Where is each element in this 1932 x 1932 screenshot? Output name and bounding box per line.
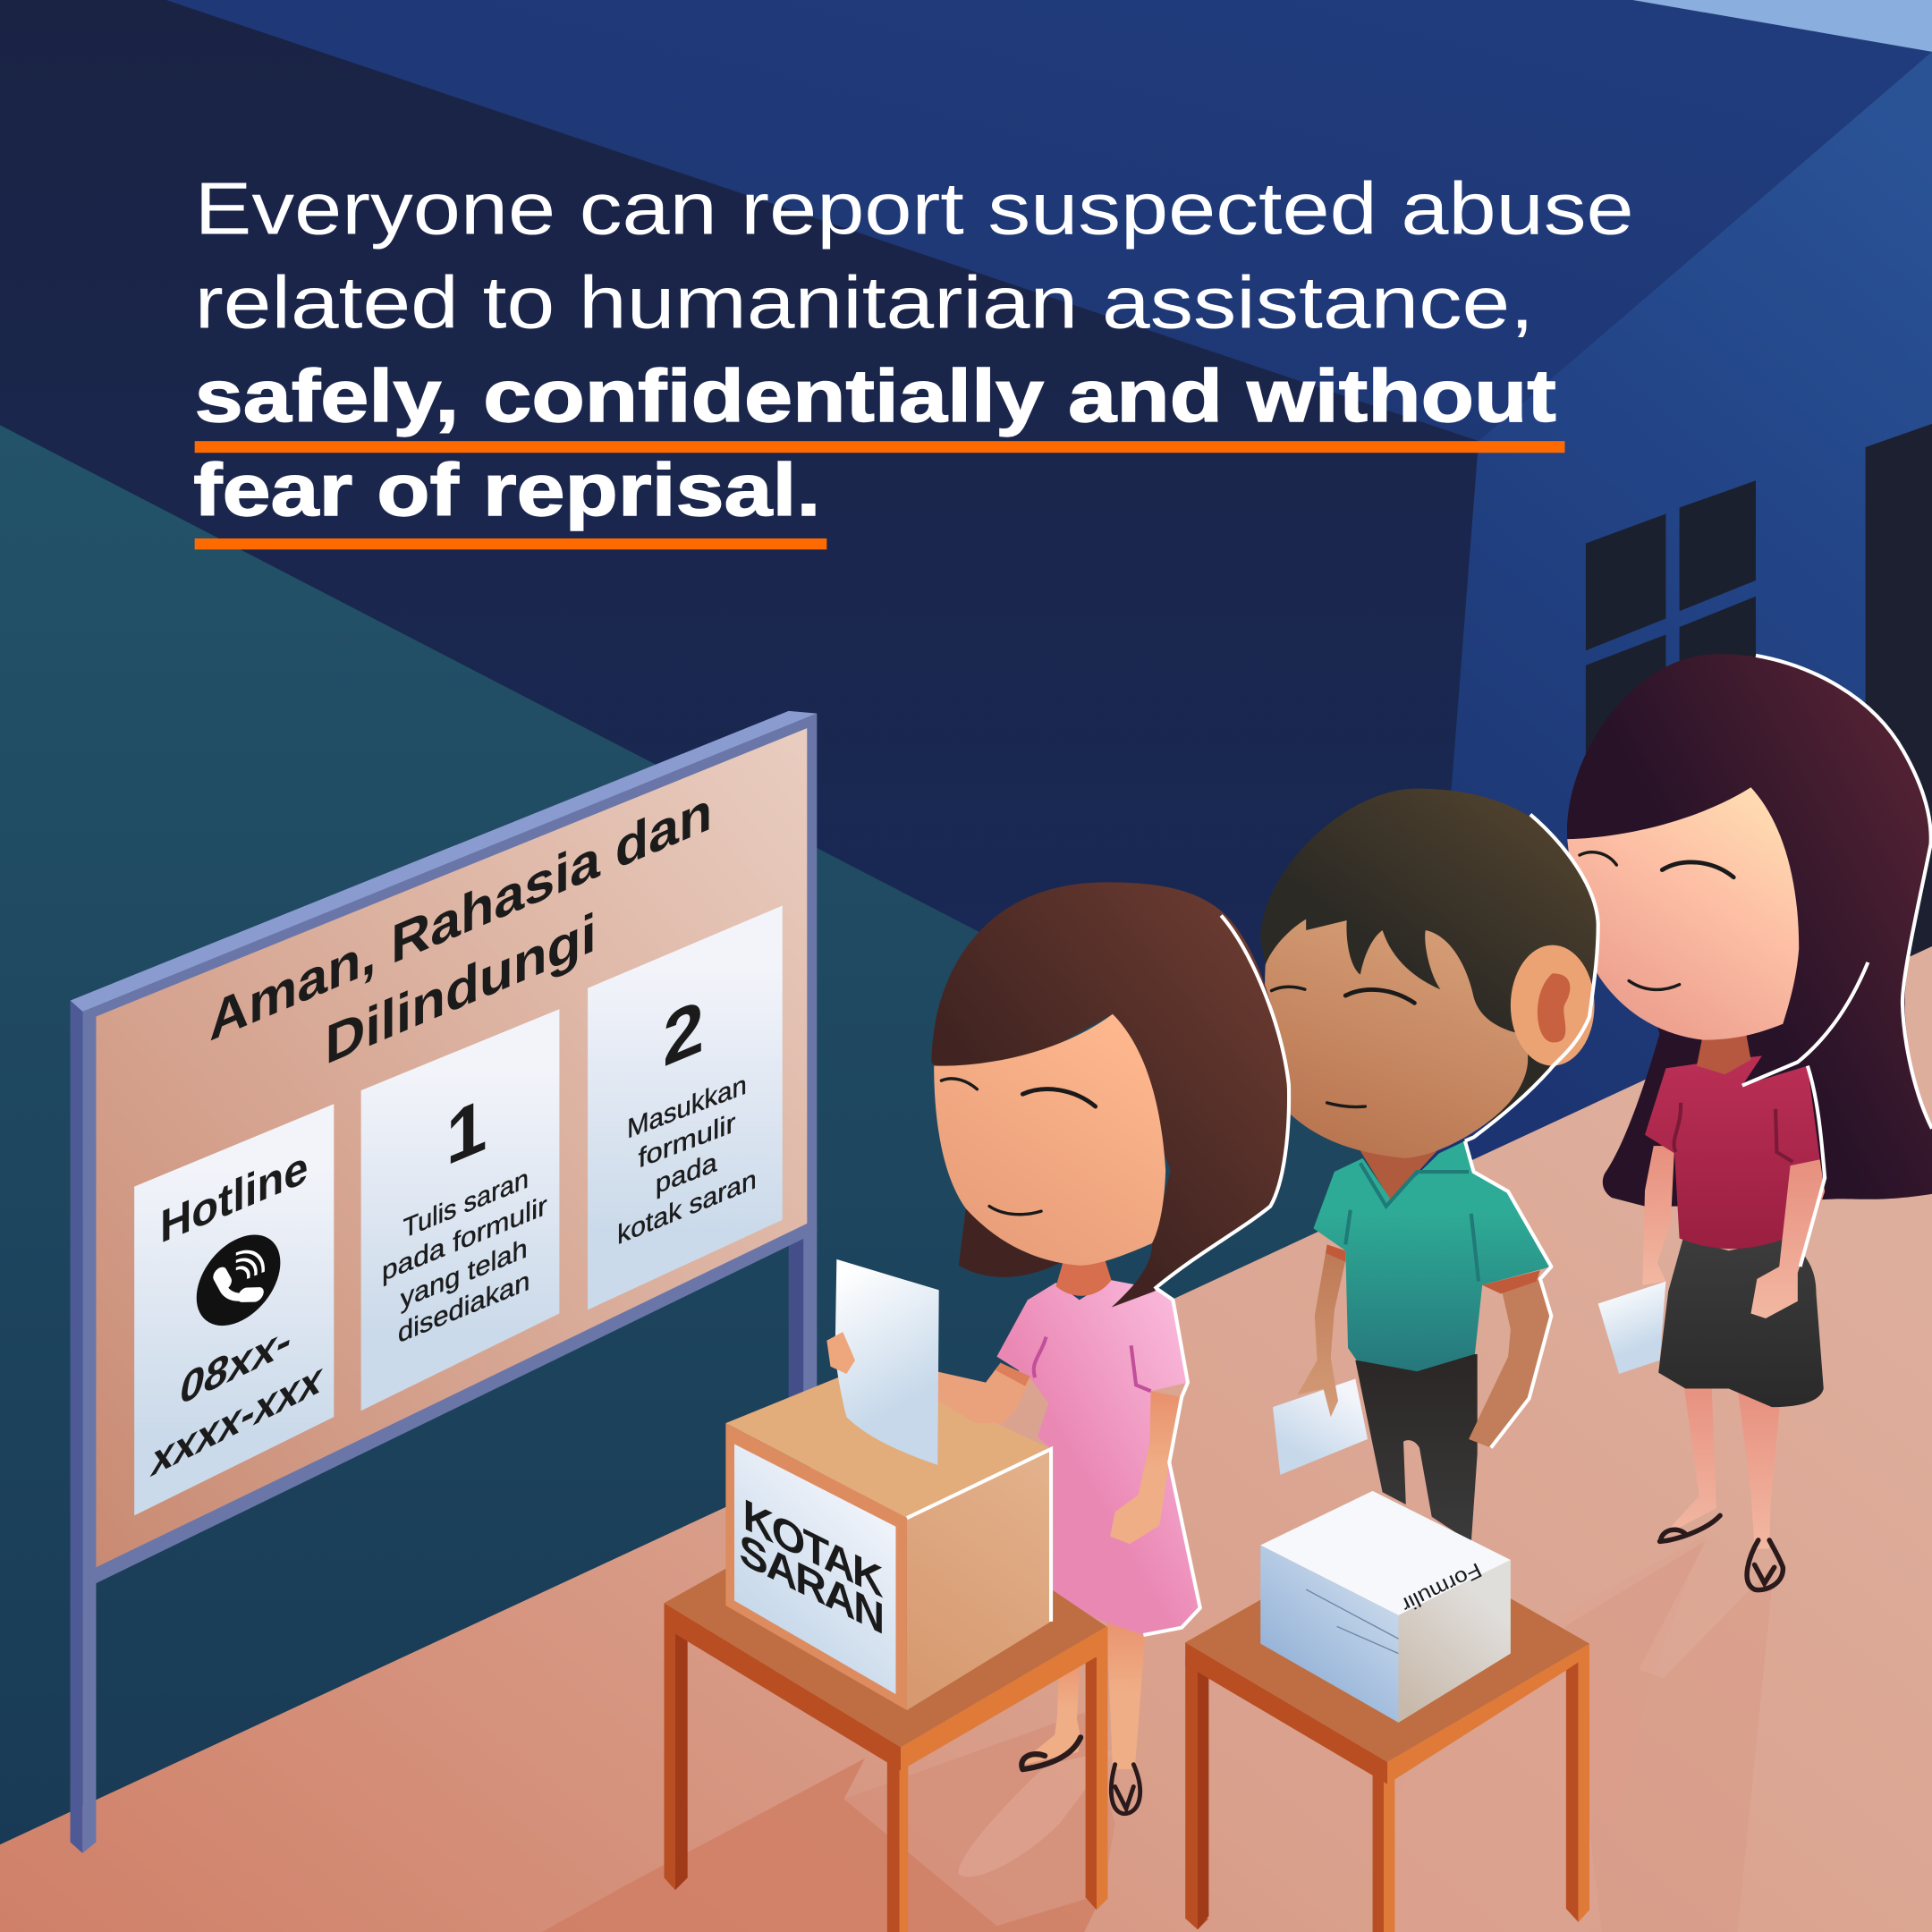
back wall bbox=[0, 0, 1479, 1182]
notice board bbox=[71, 711, 817, 1853]
hair bbox=[931, 882, 1289, 1308]
person: woman in red, back of line bbox=[1567, 654, 1932, 1590]
legs bbox=[1025, 1614, 1146, 1769]
right arm bbox=[1110, 1391, 1182, 1544]
right arm bbox=[1751, 1159, 1825, 1318]
door bbox=[1866, 424, 1932, 986]
face bbox=[934, 1014, 1165, 1266]
right wall bbox=[1393, 52, 1932, 1214]
step 2 text: kotak saran bbox=[617, 1163, 757, 1250]
hair bbox=[1260, 789, 1597, 1034]
card: step 2 bbox=[588, 905, 783, 1309]
hotline number: 08xx- bbox=[180, 1315, 291, 1414]
card: hotline bbox=[134, 1104, 334, 1515]
sandals bbox=[1660, 1515, 1783, 1590]
sleeve folds bbox=[1034, 1337, 1151, 1391]
box right face bbox=[907, 1449, 1051, 1710]
facial features bbox=[1580, 852, 1733, 989]
step 2 text: pada bbox=[656, 1146, 717, 1200]
left wall bbox=[0, 425, 1404, 1860]
person: woman in pink, at the box bbox=[931, 882, 1289, 1814]
underline 1 bbox=[195, 441, 1564, 453]
paper bbox=[1273, 1378, 1368, 1475]
table: suggestion box bbox=[664, 1479, 1107, 1932]
legs bbox=[1662, 1380, 1781, 1549]
line 2: related to humanitarian assistance, bbox=[195, 260, 1534, 343]
paper stack bbox=[1260, 1491, 1511, 1723]
hair bbox=[1567, 654, 1932, 1207]
hotline number: xxxx-xxx bbox=[149, 1352, 324, 1487]
facial features bbox=[1272, 987, 1414, 1107]
floor shadows bbox=[542, 1534, 1775, 1932]
number 2: 2 bbox=[663, 984, 704, 1083]
face bbox=[1567, 787, 1799, 1040]
hair back lock bbox=[959, 1208, 1084, 1277]
skirt bbox=[1658, 1238, 1824, 1407]
line 4 bold: fear of reprisal. bbox=[193, 448, 820, 531]
sandals bbox=[1021, 1737, 1140, 1814]
number 1: 1 bbox=[446, 1082, 487, 1182]
table top bbox=[1185, 1528, 1589, 1762]
neck bbox=[1360, 1146, 1442, 1201]
step 2 text: formulir bbox=[639, 1107, 735, 1174]
table apron bbox=[1185, 1642, 1387, 1784]
table legs bbox=[664, 1616, 1107, 1932]
box top bbox=[725, 1364, 1051, 1518]
heading: Aman, Rahasia dan bbox=[209, 780, 712, 1053]
heading: Dilindungi bbox=[326, 902, 597, 1077]
back hair bbox=[1479, 1047, 1555, 1127]
sleeve cuff bbox=[996, 1363, 1030, 1386]
ceiling bbox=[166, 0, 1932, 441]
suggestion box bbox=[725, 1364, 1051, 1710]
line 1: Everyone can report suspected abuse bbox=[195, 167, 1634, 250]
right arm bbox=[1469, 1279, 1551, 1448]
left arm bbox=[1298, 1244, 1345, 1417]
white outline bbox=[1143, 916, 1289, 1635]
left arm bbox=[1642, 1146, 1674, 1285]
box text: SARAN bbox=[740, 1523, 885, 1644]
white outline bbox=[1465, 815, 1598, 1448]
step 1 text: yang telah bbox=[401, 1232, 528, 1315]
box label bbox=[734, 1444, 895, 1694]
underline 2 bbox=[195, 538, 826, 549]
table top bbox=[664, 1479, 1106, 1747]
card: step 1 bbox=[361, 1009, 559, 1411]
title text bbox=[193, 167, 1634, 549]
neck bbox=[1056, 1257, 1112, 1296]
box outline bbox=[907, 1449, 1051, 1622]
table: forms bbox=[1185, 1491, 1589, 1932]
paper bbox=[1598, 1282, 1665, 1374]
hand bbox=[826, 1332, 855, 1374]
floor bbox=[0, 946, 1932, 1932]
box left face bbox=[725, 1423, 907, 1710]
arm bbox=[936, 1363, 1030, 1423]
top bbox=[1645, 1056, 1820, 1249]
line 3 bold: safely, confidentially and without bbox=[195, 354, 1556, 437]
step 1 text: Tulis saran bbox=[402, 1162, 529, 1244]
step 1 text: pada formulir bbox=[382, 1189, 547, 1287]
shirt bbox=[1313, 1141, 1551, 1371]
collar and sleeve folds bbox=[1345, 1163, 1479, 1282]
window bbox=[1586, 480, 1756, 789]
sleeve folds bbox=[1674, 1103, 1792, 1162]
board panel bbox=[96, 728, 807, 1567]
stack label: Formulir bbox=[1398, 1558, 1486, 1617]
step 2 text: Masukkan bbox=[627, 1069, 747, 1145]
icon: phone bbox=[197, 1221, 280, 1340]
paper bbox=[835, 1259, 939, 1465]
table apron bbox=[664, 1603, 901, 1771]
shirt cuffs bbox=[1326, 1244, 1540, 1293]
neck bbox=[1697, 1032, 1751, 1074]
table legs bbox=[1185, 1644, 1589, 1932]
white outline bbox=[1742, 656, 1932, 1267]
face bbox=[1265, 862, 1528, 1158]
dress bbox=[996, 1280, 1200, 1635]
step 1 text: disediakan bbox=[398, 1264, 530, 1349]
facial features bbox=[941, 1079, 1096, 1215]
box text: KOTAK bbox=[743, 1489, 884, 1607]
hotline label: Hotline bbox=[160, 1140, 308, 1253]
right post bbox=[789, 1226, 817, 1399]
ceiling light patch bbox=[1632, 0, 1932, 52]
arm holding paper bbox=[826, 1259, 1030, 1465]
frame bbox=[71, 711, 817, 1853]
step 1 text bbox=[382, 1162, 547, 1349]
step 2 text bbox=[617, 1069, 757, 1250]
trousers bbox=[1355, 1354, 1478, 1543]
person: man in green bbox=[1260, 789, 1598, 1543]
ear bbox=[1511, 945, 1595, 1066]
